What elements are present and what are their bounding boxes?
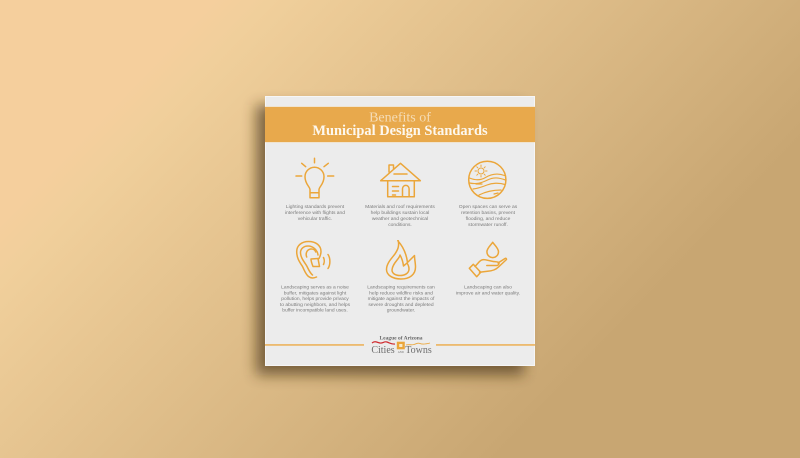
icon: house <box>381 163 420 197</box>
text: lighting <box>285 204 345 222</box>
footer rule right <box>436 344 535 346</box>
icon: ear <box>297 242 330 278</box>
text: materials: Materials and roof requirements <box>365 204 435 210</box>
text: open spaces <box>459 204 518 228</box>
heading band <box>265 106 535 142</box>
logo <box>371 336 432 356</box>
text: landscaping wildfire <box>367 284 435 314</box>
text: lighting: Lighting standards prevent <box>286 204 345 210</box>
logo: League of Arizona <box>379 336 423 342</box>
text: landscaping wildfire: help reduce wildfire risks and <box>369 290 433 296</box>
text: materials <box>365 204 435 228</box>
text: landscaping wildfire: mitigate against the impacts of <box>368 296 435 302</box>
text: air and water: Landscaping can also <box>464 284 512 290</box>
title: Benefits of <box>369 110 431 126</box>
icon: flame <box>386 241 416 279</box>
text: landscaping noise: Landscaping serves as a noise <box>281 284 349 290</box>
logo: Towns <box>405 345 432 356</box>
text: lighting: vehicular traffic. <box>298 216 332 222</box>
text: landscaping noise <box>280 284 351 314</box>
text: open spaces: retention basins, prevent <box>461 210 516 216</box>
footer rule left <box>265 344 364 346</box>
text: open spaces: Open spaces can serve as <box>459 204 518 210</box>
text: air and water <box>456 284 520 296</box>
text: landscaping wildfire: severe droughts and depleted <box>368 302 434 308</box>
icon: hand with water drop <box>469 242 506 277</box>
text: open spaces: flooding, and reduce <box>466 216 511 222</box>
text: landscaping wildfire: groundwater. <box>387 308 415 314</box>
text: lighting: interference with flights and <box>285 210 345 216</box>
text: materials: help buildings sustain local <box>371 210 429 216</box>
logo: Cities <box>371 345 395 356</box>
text: landscaping noise: to abutting neighbors, and helps <box>280 302 351 308</box>
panel: card <box>265 96 535 366</box>
text: materials: weather and geotechnical <box>372 216 428 222</box>
text: open spaces: stormwater runoff. <box>468 222 508 228</box>
text: landscaping noise: buffer, mitigates against light <box>284 290 347 296</box>
card shadow <box>256 105 524 375</box>
text: landscaping noise: buffer incompatible land uses. <box>282 308 348 314</box>
text: materials: conditions. <box>388 222 412 228</box>
icon: light bulb <box>296 158 334 198</box>
text: air and water: improve air and water quality. <box>456 290 520 296</box>
logo: AND <box>398 351 404 354</box>
icon: landscape circle <box>469 161 506 198</box>
text: landscaping noise: pollution, helps provide privacy <box>281 296 349 302</box>
title <box>312 110 488 139</box>
text: landscaping wildfire: Landscaping requirements can <box>367 284 435 290</box>
title: Municipal Design Standards <box>312 123 488 139</box>
